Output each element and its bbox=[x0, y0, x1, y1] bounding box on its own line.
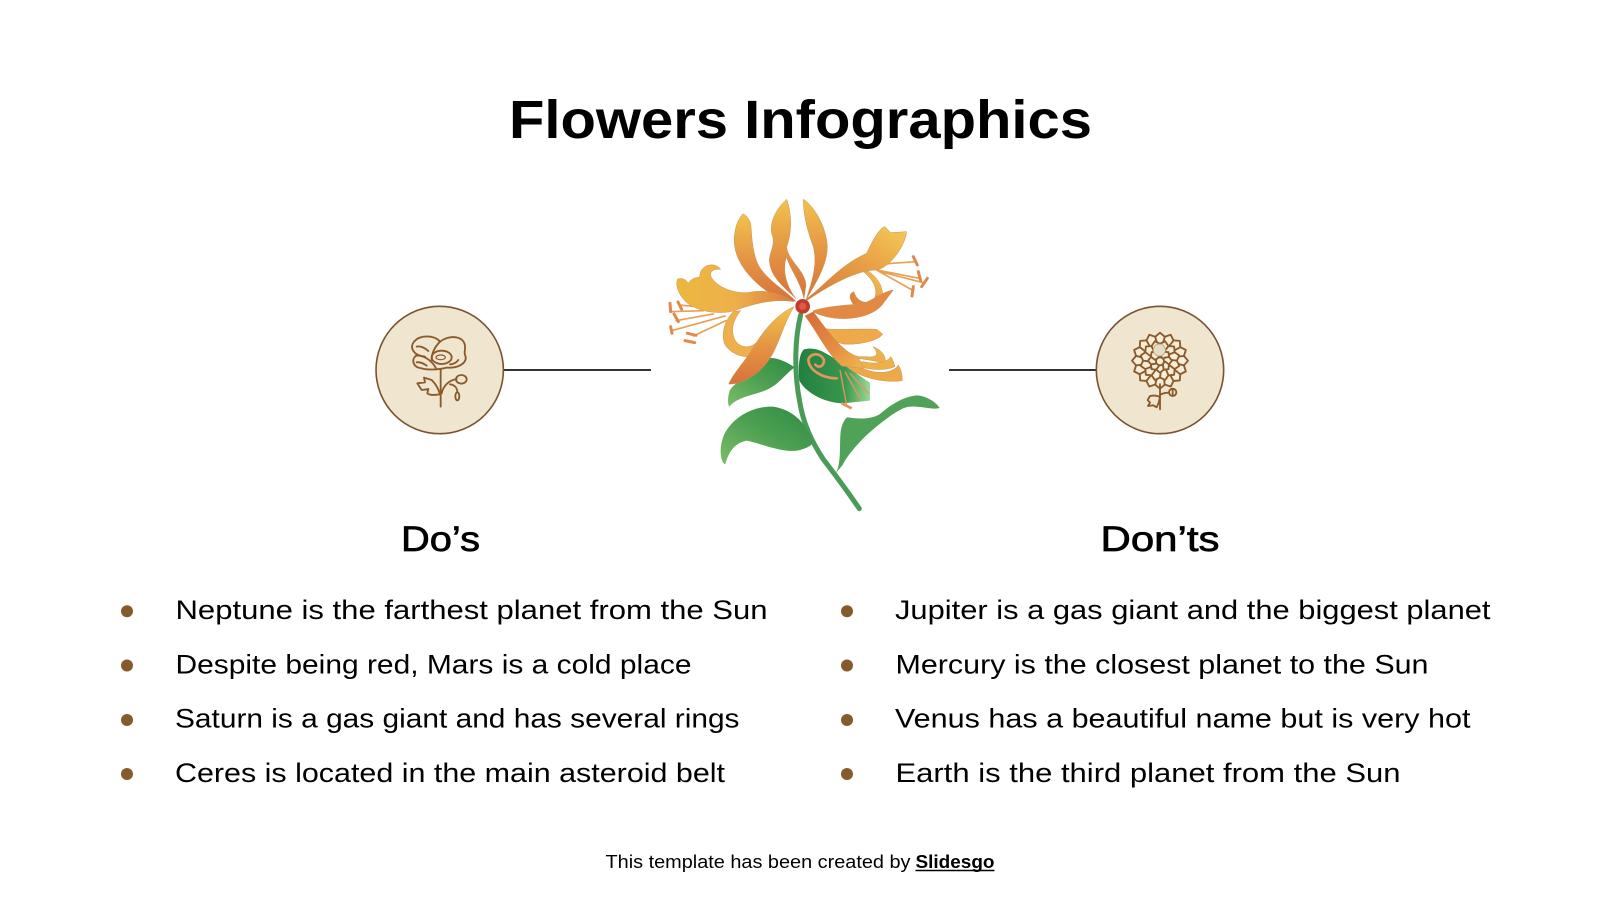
petal: upper right bbox=[807, 227, 907, 301]
petal: left bbox=[677, 265, 793, 313]
stamens lower right bbox=[840, 370, 868, 408]
petal: top right bbox=[803, 199, 827, 300]
petal: lower right lobe mid bbox=[850, 357, 895, 370]
leaf: right bbox=[835, 395, 940, 474]
heading: don'ts: Don’ts bbox=[1100, 520, 1220, 559]
title: Flowers Infographics bbox=[509, 90, 1092, 150]
list: don'ts: Jupiter is a gas giant and the biggest planet bbox=[895, 595, 1491, 625]
list: do's: Ceres is located in the main asteroid belt bbox=[175, 758, 726, 788]
list: don'ts bbox=[841, 595, 1491, 788]
illustration: honeysuckle flower bbox=[670, 199, 940, 509]
petals bbox=[677, 199, 907, 384]
petal: right curl bbox=[850, 270, 883, 310]
petal: lower right lobe low bbox=[847, 365, 902, 381]
footer credit: Slidesgo bbox=[916, 851, 994, 872]
connector line: right bbox=[949, 369, 1097, 371]
list: don'ts: Earth is the third planet from the Sun bbox=[896, 758, 1400, 788]
stamens left bbox=[670, 302, 726, 343]
stem bbox=[796, 315, 859, 509]
heading: do's: Do’s bbox=[401, 520, 480, 559]
petal: top centre bbox=[769, 199, 806, 299]
petal: lower right lobe upper bbox=[850, 347, 885, 364]
icon: dahlia in circle (don'ts) bbox=[1096, 306, 1224, 434]
petal: right mid bbox=[813, 290, 893, 319]
flower centre bbox=[795, 299, 810, 314]
list: do's: Neptune is the farthest planet from the Sun bbox=[176, 595, 768, 625]
list: do's: Despite being red, Mars is a cold place bbox=[176, 649, 692, 679]
stamens right bbox=[877, 257, 927, 296]
petal: lower right small bbox=[823, 328, 883, 344]
leaf: upper left bbox=[728, 358, 795, 407]
list: do's bbox=[121, 595, 768, 788]
connector line: left bbox=[503, 369, 651, 371]
petal: top left bbox=[734, 214, 796, 301]
petal: lower left curl bbox=[723, 311, 755, 357]
icon: poppy in circle (do's) bbox=[376, 306, 503, 434]
list: do's: Saturn is a gas giant and has several rings bbox=[175, 704, 740, 734]
list: don'ts: Mercury is the closest planet to the Sun bbox=[896, 649, 1428, 679]
leaf: large left bbox=[721, 407, 813, 464]
footer credit: This template has been created by bbox=[606, 851, 911, 872]
petal: lower left bbox=[729, 307, 794, 384]
petal: lower right body bbox=[805, 312, 863, 368]
list: don'ts: Venus has a beautiful name but is very hot bbox=[895, 704, 1471, 734]
curl on leaf bbox=[808, 354, 837, 378]
leaf: upper right dark bbox=[799, 349, 870, 403]
